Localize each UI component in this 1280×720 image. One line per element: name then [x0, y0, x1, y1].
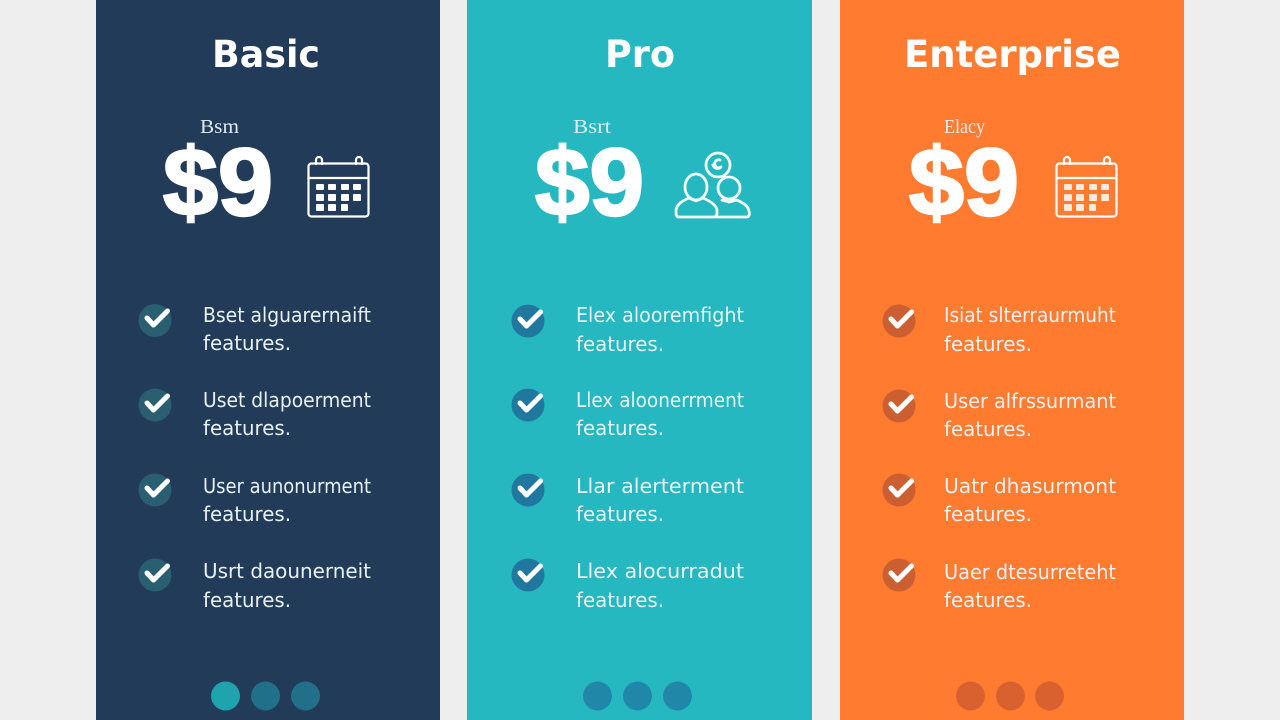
feature 2: Uset dlapoerment — [203, 388, 371, 412]
feature 4: Llex alocurradut — [576, 559, 744, 583]
feature 1: Bset alguarernaift — [203, 303, 371, 327]
feature 4 — [882, 558, 1116, 612]
feature 1: features. — [576, 332, 664, 356]
feature 2 — [512, 388, 744, 440]
pagination dots — [956, 682, 1064, 710]
feature 1: features. — [944, 332, 1032, 356]
feature 1 — [882, 303, 1116, 356]
small label above price: Bsrt — [573, 116, 612, 138]
feature 2: features. — [203, 416, 291, 440]
small label above price: Elacy — [944, 116, 985, 138]
feature 4: Uaer dtesurreteht — [944, 560, 1116, 584]
heading: Enterprise: Enterprise — [904, 33, 1121, 76]
heading: Pro: Pro — [605, 33, 675, 76]
feature 4: Usrt daounerneit — [203, 559, 371, 583]
feature 4 — [138, 558, 371, 612]
feature 2: features. — [944, 417, 1032, 441]
feature list — [882, 303, 1116, 612]
feature 3: features. — [576, 502, 664, 526]
feature 2: Llex aloonerrment — [576, 388, 744, 412]
feature 1: features. — [203, 331, 291, 355]
feature 3: Uatr dhasurmont — [944, 474, 1116, 498]
small label above price: Bsm — [200, 116, 239, 138]
feature 3: features. — [203, 502, 291, 526]
panel: Basic plan — [96, 0, 440, 720]
feature 2 — [138, 388, 371, 440]
pagination dots — [583, 682, 692, 710]
heading: Basic: Basic — [212, 33, 320, 76]
price: $9 — [535, 129, 644, 236]
price: $9 — [909, 129, 1019, 236]
feature 1 — [138, 303, 371, 355]
panel: Enterprise plan — [840, 0, 1184, 720]
feature 3: features. — [944, 502, 1032, 526]
feature 4 — [512, 558, 744, 612]
feature 1 — [512, 303, 744, 356]
feature 3: User aunonurment — [203, 474, 371, 498]
feature 2 — [882, 389, 1116, 441]
feature 3 — [138, 474, 371, 526]
price: $9 — [163, 129, 273, 236]
feature 4: features. — [203, 588, 291, 612]
icon: users — [676, 153, 749, 217]
icon: calendar — [1056, 157, 1116, 216]
feature 2: features. — [576, 416, 664, 440]
feature list — [138, 303, 371, 612]
feature 4: features. — [576, 588, 664, 612]
feature 3 — [512, 474, 744, 526]
feature 3 — [882, 474, 1116, 526]
feature 4: features. — [944, 588, 1032, 612]
panel: Pro plan — [467, 0, 812, 720]
feature 1: Isiat slterraurmuht — [944, 303, 1116, 327]
feature 2: User alfrssurmant — [944, 389, 1116, 413]
pagination dots — [211, 682, 320, 710]
feature 3: Llar alerterment — [576, 474, 744, 498]
feature 1: Elex alooremfight — [576, 303, 744, 327]
icon: calendar — [308, 157, 368, 216]
feature list — [512, 303, 744, 612]
